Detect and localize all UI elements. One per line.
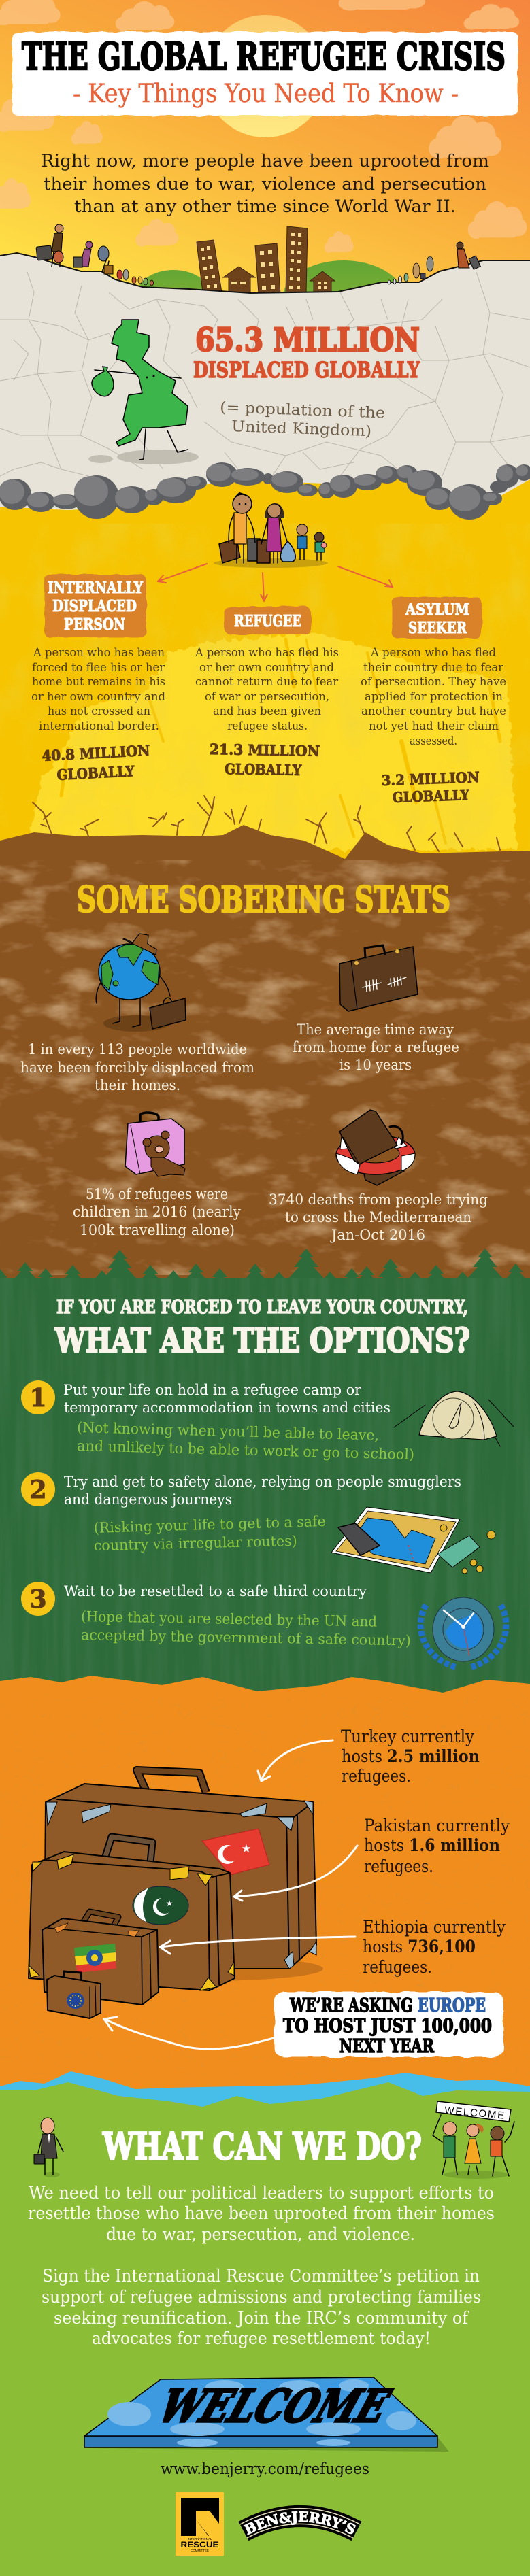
arrow: Europe [104, 2017, 274, 2049]
text: 1 in every 113: have been forcibly displaced from [20, 1060, 254, 1076]
sun [204, 15, 327, 137]
arrow: Pakistan [234, 1846, 357, 1901]
refugees walking on horizon, right [388, 242, 480, 284]
label: refugee: REFUGEE [234, 612, 301, 630]
option 3: accepted by the government of a safe country) [81, 1627, 411, 1648]
text: refugee definition: cannot return due to fear [195, 675, 339, 689]
icon: map, phone and money [331, 1507, 495, 1574]
text: political leaders: We need to tell our political leaders to support efforts to [29, 2183, 494, 2203]
text: 3740 deaths [269, 1191, 488, 1243]
stat: 3.2 million: GLOBALLY [392, 786, 470, 806]
sticker: Turkey flag: ★ [241, 1842, 252, 1856]
stat: 3.2 million [381, 768, 480, 806]
icon: tent with clock [394, 1391, 514, 1446]
logo: International Rescue Committee: RESCUE [181, 2540, 219, 2549]
clouds [0, 0, 527, 253]
option 2: (Risking your life to get to a safe [93, 1513, 326, 1536]
refugees walking on horizon, left [36, 224, 154, 286]
panel: green options background [0, 1249, 530, 1700]
option 1 [21, 1380, 414, 1463]
text: 51% of refugees: 51% of refugees were [86, 1186, 228, 1202]
icon: welcome banner with protesters [433, 2101, 514, 2179]
town buildings [197, 226, 335, 294]
number badge 2 [21, 1472, 55, 1506]
text: 51% of refugees: children in 2016 (nearly [73, 1204, 241, 1220]
girl with doll [314, 532, 327, 560]
walker with hood [73, 241, 93, 267]
note: population of the UK [220, 399, 386, 440]
family illustration [214, 493, 328, 568]
stat: 21.3 million: 21.3 MILLION [210, 741, 320, 760]
text: asylum seeker definition: not yet had their claim [369, 719, 499, 733]
sticker: Turkey flag [202, 1829, 269, 1875]
text: Turkey hosts: hosts 2.5 million [342, 1746, 480, 1766]
option 2 [21, 1472, 461, 1554]
text: IDP definition: has not crossed an [48, 705, 150, 718]
text: refugee definition: refugee status. [227, 719, 308, 733]
text: Turkey hosts: refugees. [342, 1766, 411, 1786]
boy [297, 524, 308, 560]
note: population of the UK: United Kingdom) [231, 418, 372, 440]
icon: suitcase with tally [339, 945, 418, 1011]
option 3: Wait to be resettled to a safe third country [64, 1583, 367, 1599]
option 2: country via irregular routes) [94, 1533, 297, 1554]
text: asylum seeker definition: of persecution. They have [361, 675, 506, 689]
label: asylum seeker: ASYLUM [405, 600, 469, 619]
suitcase: medium with Pakistan sticker [29, 1837, 235, 1990]
icon: pink suitcase with teddy bear [125, 1113, 185, 1176]
number badge 1 [21, 1380, 55, 1414]
text: asylum seeker definition: applied for protection in [365, 690, 503, 704]
option 2: Try and get to safety alone, relying on people smugglers [64, 1474, 461, 1490]
text: 3740 deaths: 3740 deaths from people trying [269, 1191, 488, 1208]
intro text [41, 151, 489, 216]
heading: what can we do: WHAT CAN WE DO? [102, 2124, 422, 2168]
arrow: Ethiopia [160, 1937, 355, 1954]
option 3: (Hope that you are selected by the UN and [81, 1608, 377, 1630]
icon: walking UK map character [88, 320, 199, 464]
intro text: their homes due to war, violence and persecution [44, 174, 486, 194]
number badge 3 [21, 1582, 55, 1616]
text: political leaders: resettle those who have been uprooted from their homes [28, 2203, 495, 2223]
text: 3740 deaths: to cross the Mediterranean [285, 1209, 471, 1225]
callout: asking Europe: NEXT YEAR [339, 2036, 434, 2057]
title box [12, 32, 518, 116]
horizon line [0, 253, 530, 293]
icon: UN emblem clock [420, 1597, 506, 1667]
stat: 3.2 million: 3.2 MILLION [381, 768, 480, 789]
logo: Ben and Jerry's: BEN&JERRY’S [244, 2511, 357, 2535]
text: 3740 deaths: Jan-Oct 2016 [330, 1227, 425, 1243]
suitcases [219, 539, 295, 563]
panel: yellow definitions background [0, 476, 530, 864]
text: refugee definition [195, 646, 339, 733]
text: Turkey hosts [341, 1727, 480, 1786]
text: sign the petition: support of refugee admissions and protecting families [42, 2287, 481, 2307]
suitcase: mini with EU sticker [47, 1971, 101, 2018]
label: internally displaced person: PERSON [64, 615, 125, 634]
text: IDP definition [31, 646, 165, 733]
number badge 2: 2 [29, 1476, 47, 1504]
label: refugee [225, 607, 311, 634]
mat clouds [107, 2379, 416, 2447]
callout: asking Europe: WE’RE ASKING EUROPE [289, 1995, 486, 2016]
label: internally displaced person: DISPLACED [52, 597, 137, 615]
icon: businessman [34, 2118, 63, 2177]
brush streaks [61, 639, 500, 843]
stat: 40.8 million [42, 742, 150, 783]
sticker: Ethiopia flag [74, 1944, 116, 1973]
text: refugee definition: A person who has fled his [195, 646, 339, 660]
panel: orange host countries background [0, 1676, 530, 2115]
suitcase: large with Turkey sticker [44, 1770, 323, 1981]
text: asylum seeker definition: assessed. [410, 734, 457, 748]
text: IDP definition: international border. [39, 719, 159, 733]
label: asylum seeker: SEEKER [408, 619, 467, 637]
number badge 3: 3 [29, 1585, 47, 1614]
label: internally displaced person: INTERNALLY [48, 579, 143, 597]
suitcase: small with Ethiopia sticker [42, 1912, 159, 2005]
text: average time away [293, 1021, 459, 1073]
welcome mat [84, 2377, 449, 2452]
text: refugee definition: and has been given [213, 705, 321, 718]
icon: globe with suitcase [96, 934, 186, 1032]
arrow: Turkey [258, 1740, 333, 1781]
number badge 1: 1 [29, 1384, 47, 1412]
stat: 65.3 million displaced: DISPLACED GLOBALLY [193, 357, 420, 383]
stat: 65.3 million displaced: 65.3 MILLION [195, 322, 420, 359]
logo: International Rescue Committee: INTERNATIONAL [188, 2537, 212, 2541]
option 2: and dangerous journeys [64, 1491, 232, 1508]
text: refugee definition: or her own country and [199, 661, 334, 675]
person orange [491, 2126, 504, 2156]
text: Pakistan hosts [364, 1816, 510, 1876]
text: political leaders: due to war, persecution, and violence. [106, 2224, 415, 2244]
text: Ethiopia hosts: Ethiopia currently [363, 1917, 506, 1937]
text: asylum seeker definition: another country but have [361, 705, 506, 718]
text: political leaders [28, 2183, 495, 2244]
text: asylum seeker definition: their country due to fear [363, 661, 504, 675]
icon: welcome banner with protesters: WELCOME [444, 2105, 505, 2122]
text: average time away: from home for a refugee [293, 1039, 459, 1055]
hills behind town [136, 260, 405, 338]
walker with bags [36, 224, 63, 267]
text: Ethiopia hosts: refugees. [363, 1957, 432, 1977]
rock band [0, 462, 530, 520]
text: Pakistan hosts: hosts 1.6 million [364, 1835, 500, 1855]
option 1: Put your life on hold in a refugee camp or [63, 1382, 362, 1398]
intro text: than at any other time since World War II. [74, 197, 456, 216]
logo: International Rescue Committee [176, 2492, 224, 2556]
mat lettering: WELCOME [148, 2379, 401, 2433]
person yellow [465, 2124, 484, 2163]
sticker: Pakistan flag [133, 1886, 188, 1925]
subtitle: - Key Things You Need To Know - [73, 79, 459, 108]
father [229, 493, 255, 563]
text: sign the petition: advocates for refugee resettlement today! [92, 2328, 431, 2348]
callout: asking Europe: TO HOST JUST 100,000 [283, 2016, 492, 2037]
dead twigs [33, 796, 500, 851]
text: Turkey hosts: Turkey currently [341, 1727, 475, 1746]
option 3 [21, 1582, 411, 1648]
text: average time away: is 10 years [339, 1057, 412, 1073]
stat: 65.3 million displaced [193, 322, 420, 383]
option 1: and unlikely to be able to work or go to school) [77, 1438, 414, 1463]
option 1: (Not knowing when you’ll be able to leave, [77, 1419, 379, 1444]
text: IDP definition: forced to flee his or her [32, 661, 165, 675]
stat: 40.8 million: 40.8 MILLION [42, 742, 150, 764]
text: asylum seeker definition: A person who has fled [370, 646, 496, 660]
walker with backpack [98, 246, 113, 274]
panel: green action background [0, 2082, 530, 2576]
distant walkers [117, 269, 154, 286]
panel: brown stats background [0, 796, 530, 1278]
text: asylum seeker definition [361, 646, 506, 748]
text: average time away: The average time away [297, 1021, 454, 1038]
text: refugee definition: of war or persecution, [205, 690, 329, 704]
url: www.benjerry.com/refugees [161, 2460, 369, 2478]
label: internally displaced person [44, 575, 146, 637]
text: IDP definition: A person who has been [33, 646, 165, 660]
text: sign the petition [42, 2266, 481, 2348]
text: Pakistan hosts: refugees. [364, 1857, 433, 1876]
stat: 21.3 million: GLOBALLY [225, 760, 302, 779]
text: 1 in every 113 [20, 1041, 254, 1094]
note: population of the UK: (= population of the [220, 399, 386, 422]
text: 1 in every 113: 1 in every 113 people worldwide [28, 1041, 247, 1057]
text: 51% of refugees: 100k travelling alone) [80, 1222, 235, 1238]
text: 1 in every 113: their homes. [95, 1077, 180, 1094]
arrows from family [158, 564, 393, 601]
logo: International Rescue Committee: COMMITTEE [191, 2549, 209, 2552]
text: Ethiopia hosts [363, 1917, 506, 1977]
text: IDP definition: home but remains in his [32, 675, 165, 689]
ground cracks [0, 272, 530, 476]
river band [0, 2071, 530, 2115]
distant walkers [388, 256, 433, 284]
person green [443, 2122, 457, 2158]
mother [261, 503, 287, 563]
text: Pakistan hosts: Pakistan currently [364, 1816, 510, 1835]
callout: asking Europe [274, 1992, 503, 2057]
text: sign the petition: seeking reunification. Join the IRC’s community of [54, 2308, 469, 2328]
option 1: temporary accommodation in towns and cities [64, 1400, 391, 1416]
label: asylum seeker [392, 597, 482, 639]
stat: 40.8 million: GLOBALLY [56, 762, 135, 783]
text: 51% of refugees [73, 1186, 241, 1238]
panel: cracked ground [0, 253, 530, 524]
text: sign the petition: Sign the International Rescue Committee’s petition in [42, 2266, 480, 2286]
text: IDP definition: or her own country and [31, 690, 165, 704]
walker with trolley [457, 242, 480, 269]
icon: suitcase in life ring [336, 1110, 415, 1185]
sticker: EU flag [67, 1993, 84, 2009]
text: Ethiopia hosts: hosts 736,100 [363, 1937, 476, 1956]
sticker: Pakistan flag: ★ [166, 1899, 173, 1908]
tree line [0, 1249, 530, 1302]
stat: 21.3 million [210, 741, 320, 779]
panel: sky [0, 0, 530, 306]
intro text: Right now, more people have been uprooted from [41, 151, 489, 171]
